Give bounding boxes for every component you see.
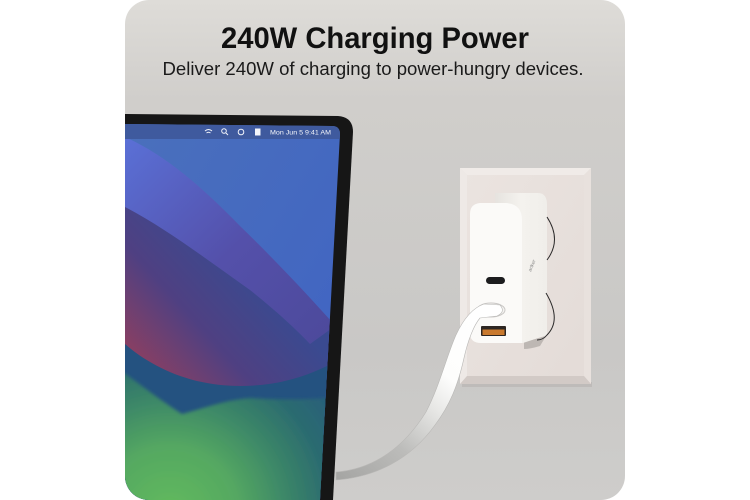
title: 240W Charging Power bbox=[221, 22, 529, 55]
socket arcs bbox=[537, 217, 554, 340]
USB-C port bbox=[486, 277, 505, 284]
infographic canvas bbox=[125, 0, 625, 500]
charger front face bbox=[470, 203, 522, 343]
cable plug collar bbox=[477, 303, 505, 317]
charger bbox=[470, 193, 554, 349]
USB-A port bbox=[481, 326, 506, 336]
menu bar icons bbox=[205, 129, 260, 135]
laptop bbox=[120, 114, 353, 500]
menu bar bbox=[125, 124, 345, 139]
menu bar clock: Mon Jun 5 9:41 AM bbox=[270, 130, 331, 136]
laptop screen wallpaper bbox=[120, 124, 345, 500]
panel: wall background bbox=[125, 0, 625, 500]
charger shadow bbox=[524, 336, 546, 349]
charging cable bbox=[336, 303, 505, 480]
cable body bbox=[336, 304, 502, 480]
wall plate bbox=[460, 168, 592, 387]
brand mark: anker bbox=[527, 259, 538, 273]
charger side face bbox=[495, 193, 547, 343]
laptop bezel bbox=[125, 114, 353, 500]
subtitle: Deliver 240W of charging to power-hungry devices. bbox=[162, 59, 584, 79]
